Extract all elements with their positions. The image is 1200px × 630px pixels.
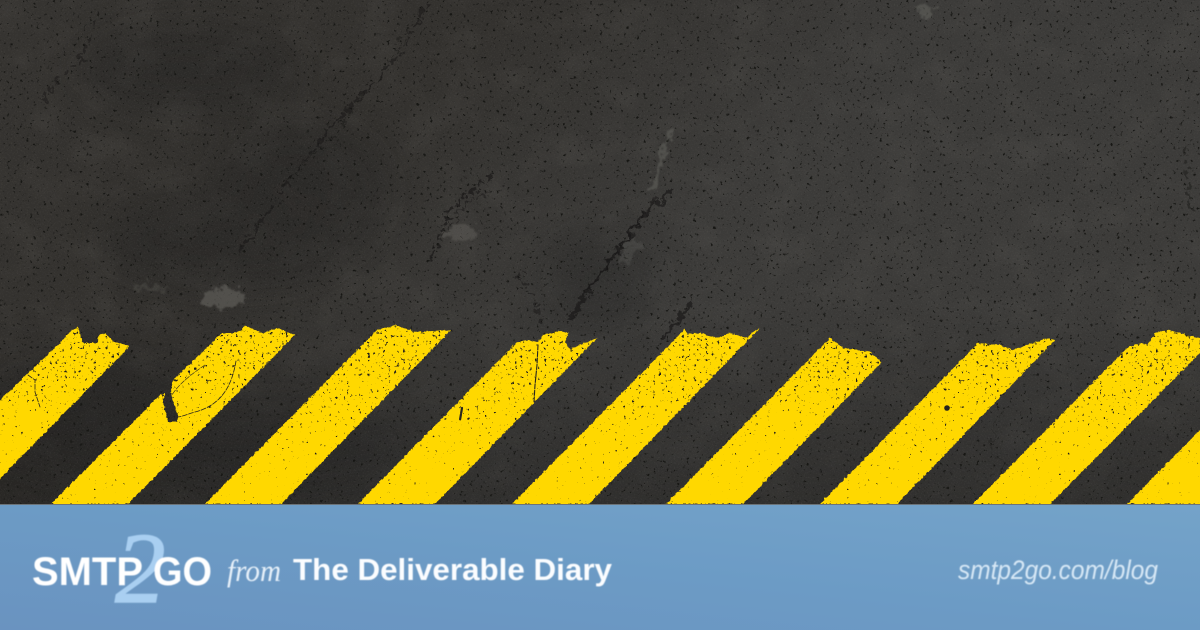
logo numeral 2: 2 — [115, 512, 166, 624]
blog title: The Deliverable Diary — [293, 552, 613, 587]
stripe 9 — [1127, 426, 1200, 504]
logo word SMTP: SMTP — [32, 550, 143, 594]
stripe 3 — [205, 325, 451, 504]
footer panel — [0, 504, 1200, 630]
stripe 8 — [973, 330, 1200, 504]
stripe 7 — [820, 338, 1055, 504]
stripe 5 — [512, 328, 760, 504]
stripe 4 — [358, 331, 597, 504]
worn patches on asphalt — [40, 2, 1190, 470]
logo word GO: GO — [153, 550, 212, 594]
stripe 1 — [0, 327, 130, 504]
from label: from — [227, 553, 281, 588]
stripe 2 — [51, 326, 295, 504]
stripe 6 — [666, 338, 882, 504]
yellow hazard stripes — [0, 320, 1200, 510]
logo: SMTP2GO — [32, 512, 212, 624]
blog url: smtp2go.com/blog — [958, 555, 1158, 585]
